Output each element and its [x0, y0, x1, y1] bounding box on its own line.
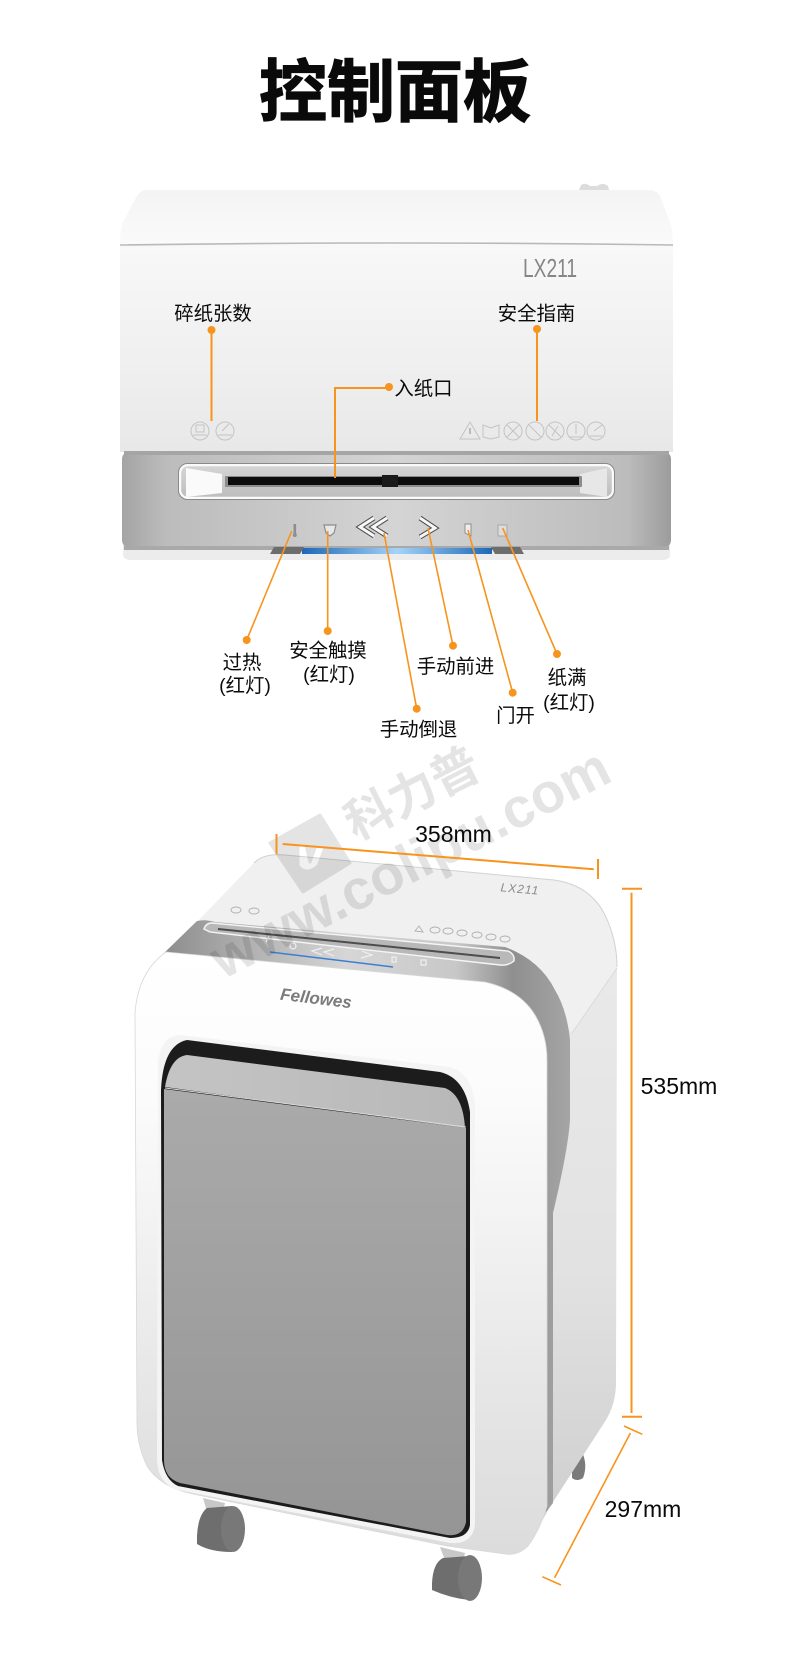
callout: manual reverse [380, 533, 457, 741]
label: paper entry [335, 378, 453, 478]
rear wheel [572, 1452, 585, 1480]
door rim [157, 1035, 475, 1543]
blue light strip [270, 952, 393, 967]
band bottom edge [124, 546, 669, 550]
door recess [161, 1040, 470, 1538]
label: paper entry: 入纸口 [394, 378, 453, 400]
dimension: depth 297mm [542, 1426, 681, 1585]
icon: manual forward [420, 518, 435, 537]
control panel close-up [120, 184, 673, 560]
callout: safety touch: 安全触摸 [289, 640, 367, 662]
door grey face [164, 1089, 466, 1535]
side and top shell [197, 855, 617, 1546]
callout: overheat: 过热 [223, 652, 261, 674]
front left wheel [197, 1498, 245, 1552]
watermark logo [270, 815, 350, 892]
door highlight [165, 1088, 466, 1127]
bottom base strip [123, 540, 670, 560]
front right wheel [432, 1547, 482, 1601]
watermark Chinese name: 科力普 [337, 738, 489, 851]
dimension: width 358mm: 358mm [415, 821, 492, 847]
icon: safety touch [324, 525, 336, 536]
bezel outline [178, 464, 614, 500]
label: safety guide [498, 303, 575, 421]
top outline [254, 855, 617, 967]
callout: overheat [219, 531, 292, 697]
paper slot bezel [180, 465, 613, 498]
callout: door open [468, 530, 535, 727]
slot line [218, 929, 500, 958]
top symbols on product [231, 907, 510, 942]
watermark [199, 735, 620, 991]
front shell [135, 952, 547, 1554]
body front [120, 245, 673, 452]
dark side segment right [491, 547, 524, 554]
callout: paper full: 纸满 [548, 667, 586, 689]
dimension: height 535mm: 535mm [641, 1073, 717, 1099]
silver wrap band and control strip [162, 920, 570, 1512]
door silver top [165, 1055, 465, 1128]
slot centre mark [382, 475, 398, 487]
callout: paper full [503, 528, 595, 714]
slot highlight right [580, 468, 607, 497]
icon: overheat [293, 524, 297, 537]
knob on lid [579, 184, 609, 190]
dimension: depth 297mm: 297mm [605, 1496, 681, 1522]
title: 控制面板 [259, 55, 531, 131]
lid seam [120, 243, 673, 245]
icon: door open [465, 524, 471, 536]
control symbols on product [266, 936, 426, 965]
callout: safety touch: (红灯) [303, 664, 355, 686]
icon: manual reverse [360, 518, 387, 536]
slot black [228, 477, 579, 485]
blue light bar [302, 548, 492, 554]
icons: safety guide [460, 422, 605, 440]
top panel [197, 855, 617, 1033]
icon: sheet capacity [191, 422, 209, 440]
label: sheet capacity: 碎纸张数 [174, 303, 252, 325]
silver control band [122, 451, 671, 548]
callout: manual forward: 手动前进 [417, 656, 494, 678]
callout: safety touch [289, 531, 367, 686]
callout: paper full: (红灯) [543, 692, 595, 714]
paper slot on product [204, 923, 514, 965]
brand logo: Fellowes [279, 985, 353, 1012]
callout: door open: 门开 [496, 705, 535, 727]
label: sheet capacity [174, 303, 252, 421]
icon: paper type [216, 422, 234, 440]
dimension: width 358mm [276, 821, 598, 879]
callout: overheat: (红灯) [219, 675, 271, 697]
side seam [572, 968, 617, 1033]
callout: manual forward [417, 528, 494, 678]
model label on top: LX211 [500, 880, 540, 898]
slot highlight left [186, 468, 222, 497]
model label LX211: LX211 [523, 253, 577, 283]
paper slot opening [225, 476, 582, 487]
icon: paper full [498, 525, 507, 536]
band top edge [124, 451, 669, 455]
watermark URL: www.colipu.com [199, 735, 620, 991]
callout: manual reverse: 手动倒退 [380, 719, 457, 741]
lid [120, 190, 673, 245]
shredder product [135, 855, 617, 1601]
dark side segment left [270, 547, 304, 554]
label: safety guide: 安全指南 [498, 303, 575, 325]
